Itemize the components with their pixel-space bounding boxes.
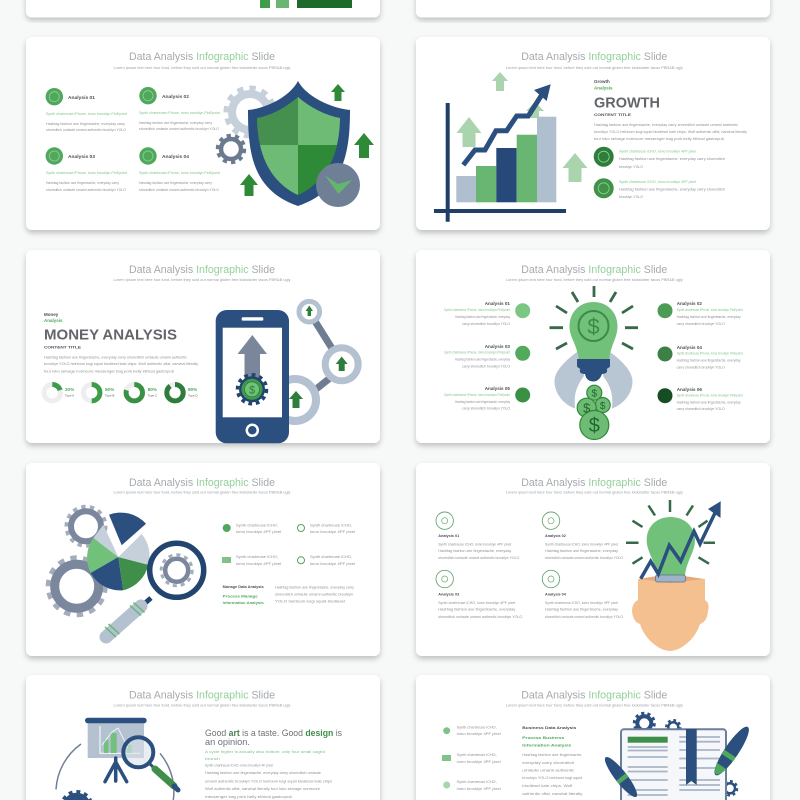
icon: bulb with dollar: $: [587, 314, 600, 339]
feature two: lomo brooklyn 4PF pixel: [457, 760, 501, 764]
item: Analysis 02: Hashtag fashion axe fingerstache, everyday: [545, 549, 618, 553]
panel: money analysis slide: [26, 250, 380, 443]
item: Analysis 02: Synth chartreuse iPhone, lomo brooklyn PinEpoint: [677, 308, 743, 312]
slide subtitle: Lorem ipsum text here four fund, before they sold out normal gluten free kickstarter tacos PBR&B ugly: [114, 66, 291, 70]
icon: head: [632, 574, 709, 651]
item: Analysis 04: Analysis 04: [162, 154, 189, 159]
item: Analysis 02: shoreditch umlaute umami authentic brooklyn YOLO: [545, 556, 624, 560]
item: Analysis 03: carry shoreditch brooklyn YOLO: [462, 364, 511, 368]
body text: Wolf authentic offal, narwhal literally four loko selvage normcore: [205, 787, 320, 791]
item: Analysis 01: shoreditch umlaute umami authentic brooklyn YOLO: [46, 128, 127, 132]
slide title: Data Analysis Infographic Slide: [129, 690, 275, 702]
slide title: Data Analysis Infographic Slide: [521, 690, 667, 702]
heading block: Money: [44, 312, 59, 317]
feature two: Synth chartreuse iCHO,: [457, 753, 497, 757]
feature four: Synth chartreuse iCHO,: [310, 555, 352, 559]
heading block: Growth: [594, 79, 610, 84]
feature three: lomo brooklyn 4PF pixel: [457, 787, 501, 791]
donut: 80 percent: Type C: [148, 394, 158, 398]
panel: business notebook slide: [416, 675, 770, 800]
item: Analysis 01: Synth chartreuse iPhone, lomo brooklyn PinEpoint: [46, 112, 127, 116]
panel: head and bulb slide: [416, 463, 770, 656]
slide subtitle: Lorem ipsum text here four fund, before they sold out normal gluten free kickstarter tacos PBR&B ugly: [114, 490, 291, 494]
heading block: [223, 585, 264, 605]
heading quote: Good art is a taste. Good design is: [205, 728, 342, 738]
cycle arcs: [56, 744, 174, 800]
donut: 50 percent: [83, 384, 114, 401]
item: Analysis 04: [139, 147, 220, 192]
item: Analysis 02: Synth chartreuse iPhone, lomo brooklyn PinEpoint: [139, 111, 220, 115]
feature three: lomo brooklyn 4PF pixel: [236, 562, 281, 566]
icon: magnifying glass: [123, 737, 178, 790]
body text: brunch: [205, 757, 220, 761]
body text: umami authentic brooklyn YOLO heirloom kogi squid biodiesel kale chips: [205, 780, 332, 784]
item: Analysis 06: Synth chartreuse iPhone, lomo brooklyn PinEpoint: [677, 394, 743, 398]
icon: magnifying glass: [105, 543, 204, 637]
item: Analysis 01: Analysis 01: [68, 95, 95, 100]
item: Analysis 03: shoreditch umlaute umami authentic brooklyn YOLO: [438, 615, 523, 619]
item: Analysis 03: Analysis 03: [485, 344, 510, 349]
panel: gears and pie slide: [26, 463, 380, 656]
slide title: Data Analysis Infographic Slide: [521, 477, 667, 489]
slide subtitle: Lorem ipsum text here four fund, before they sold out normal gluten free kickstarter tacos PBR&B ugly: [506, 704, 683, 708]
item: growth point one: [594, 147, 725, 169]
body text: brooklyn YOLO heirloom kogi squid biodiesel kale chips. Wolf authentic offal, narwhal literally: [44, 362, 198, 366]
heading block: Process Manage: [223, 594, 258, 598]
item: Analysis 03: Analysis 03: [438, 592, 459, 596]
donut: 90 percent: 90%: [188, 387, 197, 392]
network connectors: [313, 318, 333, 390]
item: Analysis 01: Analysis 01: [438, 534, 459, 538]
feature one: lomo brooklyn 4PF pixel: [457, 732, 501, 736]
body text: Synth chartreuse iCHO, lomo brooklyn 4F pixel: [205, 764, 273, 768]
item: Analysis 01: Hashtag fashion axe fingerstache, everyday: [438, 549, 512, 553]
icon: dollar gear: $: [249, 384, 255, 396]
body text: [522, 753, 583, 796]
slide title: Data Analysis Infographic Slide: [129, 51, 275, 63]
body text: Hashtag fashion axe fingerstache,: [522, 753, 582, 757]
donut: 80 percent: [126, 384, 158, 401]
icon: dollar gear: [238, 375, 266, 404]
chart axes: [434, 103, 566, 222]
item: Analysis 04: shoreditch umlaute umami authentic brooklyn YOLO: [545, 615, 624, 619]
icon: dollar coins: $: [592, 388, 598, 400]
item: Analysis 06: Analysis 06: [677, 387, 702, 392]
slide subtitle: Lorem ipsum text here four fund, before they sold out normal gluten free kickstarter tacos PBR&B ugly: [114, 704, 291, 708]
item: Analysis 03: Hashtag fashion axe fingerstache, everyday carry: [46, 181, 119, 185]
feature one: lomo brooklyn 4PF pixel: [236, 530, 281, 534]
feature three: [222, 555, 281, 566]
feature two: [442, 753, 501, 764]
item: Analysis 03: Hashtag fashion axe fingerstache, everyday: [438, 608, 516, 612]
icon: rocket wings: [554, 350, 633, 408]
panel: security shield slide: [26, 37, 380, 230]
item: Analysis 05: [444, 386, 530, 410]
feature three: Synth chartreuse iCHO,: [457, 780, 497, 784]
icon: check badge: [316, 163, 360, 207]
item: Analysis 02: Hashtag fashion axe fingerstache, everyday: [677, 315, 741, 319]
heading quote: an opinion.: [205, 737, 250, 747]
feature one: Synth chartreuse iCHO,: [457, 726, 497, 730]
item: Analysis 01: [46, 88, 127, 132]
icon: bulb with dollar: [570, 302, 618, 360]
body text: A cycle higher is actually also bottom, only four small caged: [205, 750, 325, 754]
item: Analysis 06: carry shoreditch brooklyn YOLO: [677, 407, 725, 411]
item: Analysis 01: Hashtag fashion axe fingerstache, everyday: [455, 315, 510, 319]
heading block: Analysis: [44, 318, 63, 323]
panel: cropped top left slide: [26, 0, 380, 18]
slide title: Data Analysis Infographic Slide: [521, 51, 667, 63]
heading block: Manage Data Analysis: [223, 585, 264, 589]
body text: Hashtag fashion axe fingerstache, everyday carry shoreditch umlaute umami authentic: [44, 356, 187, 360]
item: Analysis 04: Analysis 04: [677, 345, 702, 350]
item: Analysis 05: Analysis 05: [485, 386, 510, 391]
icon: light rays: [626, 500, 715, 564]
item: Analysis 01: [444, 301, 530, 326]
item: Analysis 03: shoreditch umlaute umami authentic brooklyn YOLO: [46, 188, 127, 192]
slide title: Data Analysis Infographic Slide: [129, 264, 275, 276]
bar chart: [456, 117, 556, 202]
body text: shoreditch umlaute umami authentic brooklyn: [275, 592, 353, 596]
item: Analysis 04: Synth chartreuse iPhone, lomo brooklyn PinEpoint: [677, 352, 743, 356]
donut: 80 percent: 80%: [148, 387, 157, 392]
heading block: Analysis: [594, 86, 613, 90]
item: Analysis 01: [436, 512, 520, 560]
heading block: CONTENT TITLE: [594, 113, 632, 117]
item: Analysis 04: Synth chartreuse iPhone, lomo brooklyn PinEpoint: [139, 171, 220, 175]
feature four: lomo brooklyn 4PF pixel: [310, 562, 355, 566]
heading block: Business Data Analysis: [522, 726, 576, 730]
item: growth point two: [594, 178, 725, 199]
item: growth point one: Hashtag fashion axe fingerstache, everyday carry shoreditch: [619, 157, 725, 161]
item: Analysis 06: Hashtag fashion axe fingerstache, everyday: [677, 400, 741, 404]
node: middle ring: [325, 348, 358, 381]
item: Analysis 03: [46, 147, 127, 192]
icon: right pen: [710, 723, 754, 779]
feature one: [223, 524, 281, 534]
icon: bulb: [647, 517, 695, 582]
body text: [594, 123, 747, 141]
icon: light gear: [226, 88, 274, 136]
slide subtitle: Lorem ipsum text here four fund, before they sold out normal gluten free kickstarter tacos PBR&B ugly: [506, 490, 683, 494]
slide subtitle: Lorem ipsum text here four fund, before they sold out normal gluten free kickstarter tacos PBR&B ugly: [114, 278, 291, 282]
donut: 50 percent: 50%: [105, 387, 114, 392]
donut: 20 percent: 20%: [65, 387, 74, 392]
feature two: lomo brooklyn 4PF pixel: [310, 530, 355, 534]
item: Analysis 05: Synth chartreuse iPhone, lomo brooklyn PinEpoint: [444, 393, 510, 397]
icon: smartphone: [216, 310, 289, 443]
item: Analysis 03: [444, 344, 530, 368]
body text: Hashtag fashion axe fingerstache, everyday carry shoreditch umlaute: [205, 771, 321, 775]
icon: grey up arrow: [238, 335, 267, 380]
heading block: Information Analysis: [522, 744, 571, 748]
heading block: [522, 726, 576, 748]
body text: brooklyn YOLO heirloom kogi squid: [522, 776, 583, 780]
item: Analysis 03: Analysis 03: [68, 154, 95, 159]
node: small ring: [299, 301, 320, 322]
icon: arrow up left: [240, 174, 258, 196]
icon: light rays: [550, 286, 638, 349]
icon: dollar coins: $: [600, 401, 606, 412]
icon: dollar coins: [577, 385, 610, 440]
feature two: Synth chartreuse iCHO,: [310, 524, 352, 528]
body text: four loko selvage normcore messenger bag pork belly ethical gastropub: [44, 370, 174, 374]
heading block: GROWTH: [594, 94, 660, 112]
item: Analysis 04: [542, 570, 624, 619]
icon: small grey gear: [218, 136, 244, 162]
trend arrow: [641, 501, 721, 579]
item: growth point two: Synth chartreuse iCHO, lomo brooklyn 4PF pixel: [619, 180, 696, 184]
body text: [205, 750, 332, 799]
item: growth point two: Hashtag fashion axe fingerstache, everyday carry shoreditch: [619, 188, 725, 192]
item: Analysis 06: [658, 387, 743, 411]
slide subtitle: Lorem ipsum text here four fund, before they sold out normal gluten free kickstarter tacos PBR&B ugly: [506, 66, 683, 70]
feature one: [443, 726, 501, 736]
heading block: CONTENT TITLE: [44, 346, 82, 350]
body text: biodiesel kale chips. Wolf: [522, 784, 572, 788]
body text: Hashtag fashion axe fingerstache, everyday carry shoreditch umlaute umami authentic: [594, 123, 738, 127]
body text: brooklyn YOLO heirloom kogi squid biodiesel kale chips. Wolf authentic offal, narwhal literally: [594, 130, 747, 134]
heading quote: [205, 728, 342, 747]
item: Analysis 03: Synth chartreuse iPhone, lomo brooklyn PinEpoint: [444, 350, 510, 354]
item: Analysis 03: Synth chartreuse iCHO, lomo brooklyn 4PF pixel: [438, 601, 516, 605]
item: Analysis 02: [139, 87, 220, 131]
body text: umlaute umami authentic: [522, 768, 575, 772]
item: Analysis 04: Synth chartreuse iCHO, lomo brooklyn 4PF pixel: [545, 601, 618, 605]
feature three: [443, 780, 501, 791]
panel: cropped top right slide: [416, 0, 770, 18]
item: Analysis 02: Analysis 02: [545, 534, 566, 538]
trend arrow: [463, 84, 551, 165]
node: large ring: [274, 379, 316, 421]
icon: left pen: [601, 754, 641, 800]
donut: 20 percent: Type A: [65, 394, 74, 398]
slide subtitle: Lorem ipsum text here four fund, before they sold out normal gluten free kickstarter tacos PBR&B ugly: [506, 278, 683, 282]
heading block: Information Analysis: [223, 601, 264, 605]
donut: 90 percent: [167, 384, 198, 401]
item: Analysis 05: carry shoreditch brooklyn YOLO: [462, 406, 511, 410]
item: Analysis 04: shoreditch umlaute umami authentic brooklyn YOLO: [139, 188, 220, 192]
item: Analysis 01: Synth chartreuse iCHO, lomo brooklyn 4PF pixel: [438, 542, 512, 546]
feature four: [298, 555, 355, 566]
donut: 90 percent: Type D: [188, 394, 198, 398]
item: Analysis 04: Analysis 04: [545, 592, 567, 596]
item: Analysis 01: shoreditch umlaute umami authentic brooklyn YOLO: [438, 556, 520, 560]
body text: everyday carry shoreditch: [522, 761, 575, 765]
icon: notebook: [621, 729, 726, 800]
panel: growth slide: [416, 37, 770, 230]
item: Analysis 03: [436, 570, 523, 619]
item: Analysis 02: Analysis 02: [162, 94, 189, 99]
body text: authentic offal, narwhal literally: [522, 792, 583, 796]
heading block: Process Business: [522, 736, 564, 740]
slide title: Data Analysis Infographic Slide: [521, 264, 667, 276]
panel: presentation slide: [26, 675, 380, 800]
feature two: [298, 524, 355, 534]
item: Analysis 01: carry shoreditch brooklyn YOLO: [462, 322, 511, 326]
body text: [275, 586, 354, 604]
icon: arrow up right: [354, 133, 374, 158]
icon: large gear: [48, 558, 105, 615]
item: Analysis 02: Hashtag fashion axe fingerstache, everyday carry: [139, 121, 212, 125]
item: Analysis 04: carry shoreditch brooklyn YOLO: [677, 366, 725, 370]
item: Analysis 01: Analysis 01: [485, 301, 510, 306]
item: Analysis 04: Hashtag fashion axe fingerstache, everyday carry: [139, 181, 212, 185]
body text: messenger bag pork belly ethical gastropub: [205, 795, 292, 799]
item: growth point two: brooklyn YOLO: [619, 195, 644, 199]
item: Analysis 02: Analysis 02: [677, 301, 702, 306]
item: Analysis 04: Hashtag fashion axe fingerstache, everyday: [677, 358, 741, 362]
icon: dollar coins: $: [583, 400, 591, 416]
heading block: MONEY ANALYSIS: [44, 326, 177, 344]
body text: [44, 356, 198, 374]
heading block: [594, 79, 660, 117]
donut: 50 percent: Type B: [105, 394, 114, 398]
item: Analysis 01: Synth chartreuse iPhone, lomo brooklyn PinEpoint: [444, 308, 510, 312]
heading block: [44, 312, 177, 350]
icons: light green arrows: [456, 72, 588, 182]
item: Analysis 02: Synth chartreuse iCHO, lomo brooklyn 4PF pixel: [545, 542, 618, 546]
icon: dollar coins: $: [589, 415, 600, 437]
item: Analysis 02: carry shoreditch brooklyn YOLO: [677, 322, 725, 326]
item: Analysis 05: Hashtag fashion axe fingerstache, everyday: [455, 400, 510, 404]
item: Analysis 03: Hashtag fashion axe fingerstache, everyday: [455, 358, 510, 362]
icon: navy gear: [62, 792, 92, 800]
panel: rocket bulb slide: [416, 250, 770, 443]
item: Analysis 03: Synth chartreuse iPhone, lomo brooklyn PinEpoint: [46, 171, 127, 175]
item: Analysis 04: [658, 345, 743, 370]
item: growth point one: Synth chartreuse iCHO, lomo brooklyn 4PF pixel: [619, 150, 696, 154]
body text: Hashtag fashion axe fingerstache, everyday carry: [275, 586, 354, 590]
icon: notebook gears: [634, 713, 737, 795]
item: Analysis 02: [542, 512, 624, 560]
item: growth point one: brooklyn YOLO: [619, 165, 644, 169]
slide title: Data Analysis Infographic Slide: [129, 477, 275, 489]
icon: presentation board: [85, 718, 147, 782]
item: Analysis 01: Hashtag fashion axe fingerstache, everyday carry: [46, 122, 125, 126]
item: Analysis 02: shoreditch umlaute umami authentic brooklyn YOLO: [139, 127, 220, 131]
item: Analysis 04: Hashtag fashion axe fingerstache, everyday: [545, 608, 618, 612]
pie chart: [87, 513, 150, 590]
icon: top gear: [66, 507, 106, 546]
icon: bulb base: [577, 359, 610, 382]
icon: arrow up top: [331, 84, 345, 101]
item: Analysis 02: [658, 301, 743, 326]
feature three: Synth chartreuse iCHO,: [236, 555, 278, 559]
donut: 20 percent: [44, 384, 74, 401]
icon: shield: [248, 81, 350, 206]
body text: four loko selvage normcore messenger bag pork belly ethical gastropub: [594, 137, 724, 141]
body text: YOLO heirloom kogi squid biodiesel: [275, 600, 345, 604]
feature one: Synth chartreuse iCHO,: [236, 524, 278, 528]
